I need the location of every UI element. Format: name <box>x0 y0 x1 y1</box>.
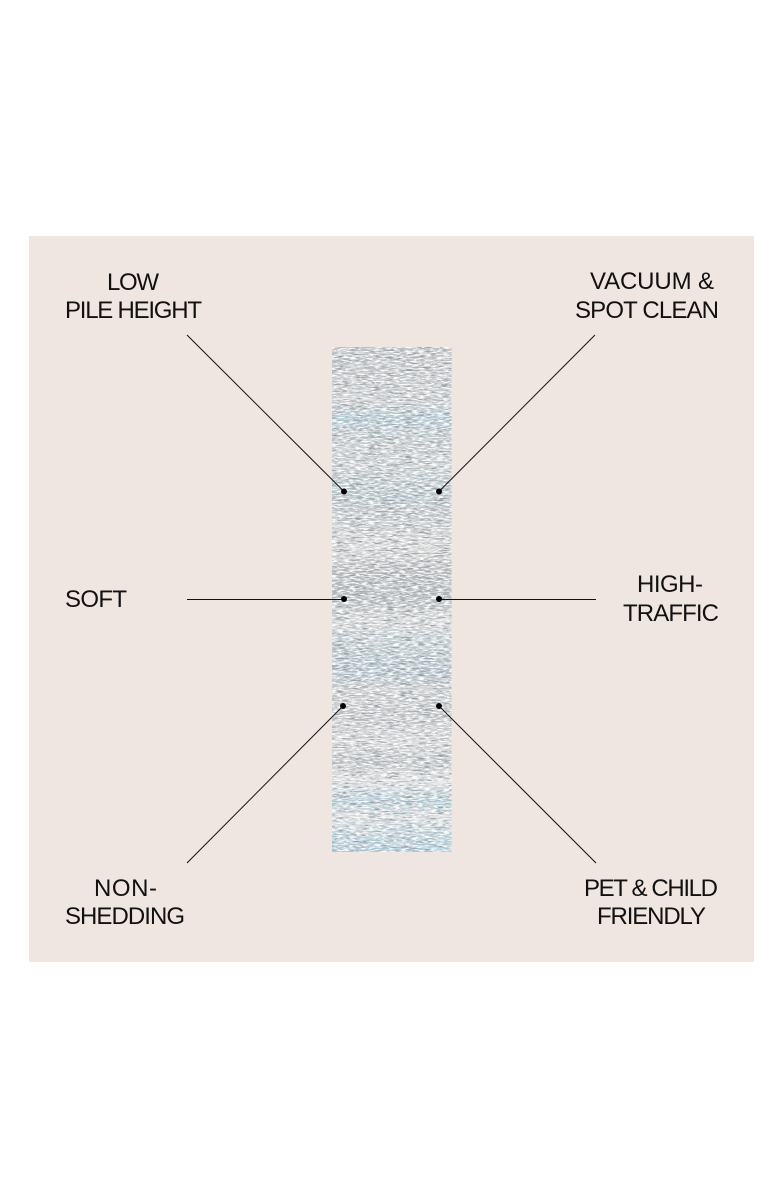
callout: low pile height: PILE HEIGHT <box>65 297 202 324</box>
callout: pet and child friendly: FRIENDLY <box>597 903 706 930</box>
callout: vacuum and spot clean: SPOT CLEAN <box>575 297 719 324</box>
callout: non-shedding: NON- <box>94 875 157 902</box>
callout: high-traffic <box>436 571 719 627</box>
callout: non-shedding <box>65 703 346 930</box>
callout: pet and child friendly: PET & CHILD <box>584 875 718 902</box>
callout: pet and child friendly <box>436 703 718 930</box>
rug runner image <box>332 347 452 852</box>
callout: soft: SOFT <box>65 586 127 613</box>
callout: vacuum and spot clean <box>436 268 719 494</box>
callout: high-traffic: TRAFFIC <box>623 600 719 627</box>
callout: non-shedding: SHEDDING <box>65 903 185 930</box>
callout: high-traffic: HIGH- <box>637 571 703 598</box>
callout: soft <box>65 586 347 613</box>
callout: low pile height <box>65 269 347 494</box>
callout: vacuum and spot clean: VACUUM & <box>590 268 714 295</box>
panel: beige background <box>29 236 754 962</box>
callout: low pile height: LOW <box>107 269 159 296</box>
